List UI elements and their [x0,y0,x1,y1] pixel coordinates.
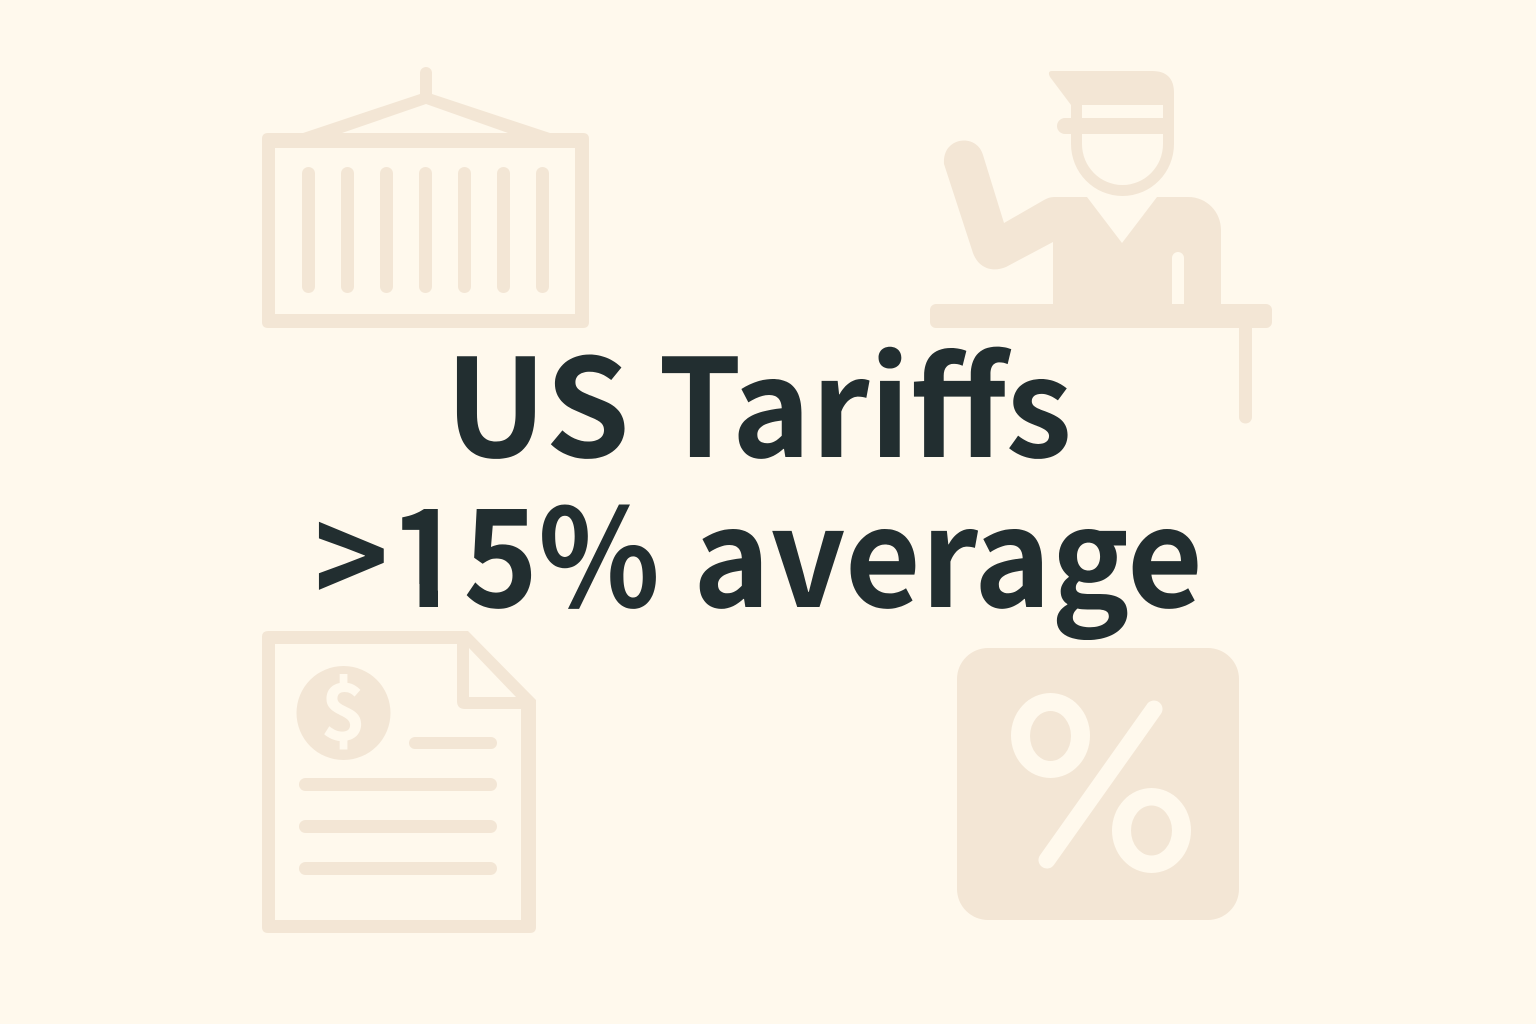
title line 2: >15% [314,450,660,647]
title line 1: Tariffs [658,300,1072,497]
icon: invoice document with dollar [262,631,536,933]
dollar sign: $ [320,651,367,763]
title line 2 [314,450,1203,647]
title line 1: US [445,300,630,497]
title [314,300,1203,647]
icon: shipping container [262,67,589,328]
icon: customs officer [930,71,1272,424]
icon: percent tile [957,648,1239,920]
title line 2: average [693,450,1203,647]
title line 1 [445,300,1072,497]
